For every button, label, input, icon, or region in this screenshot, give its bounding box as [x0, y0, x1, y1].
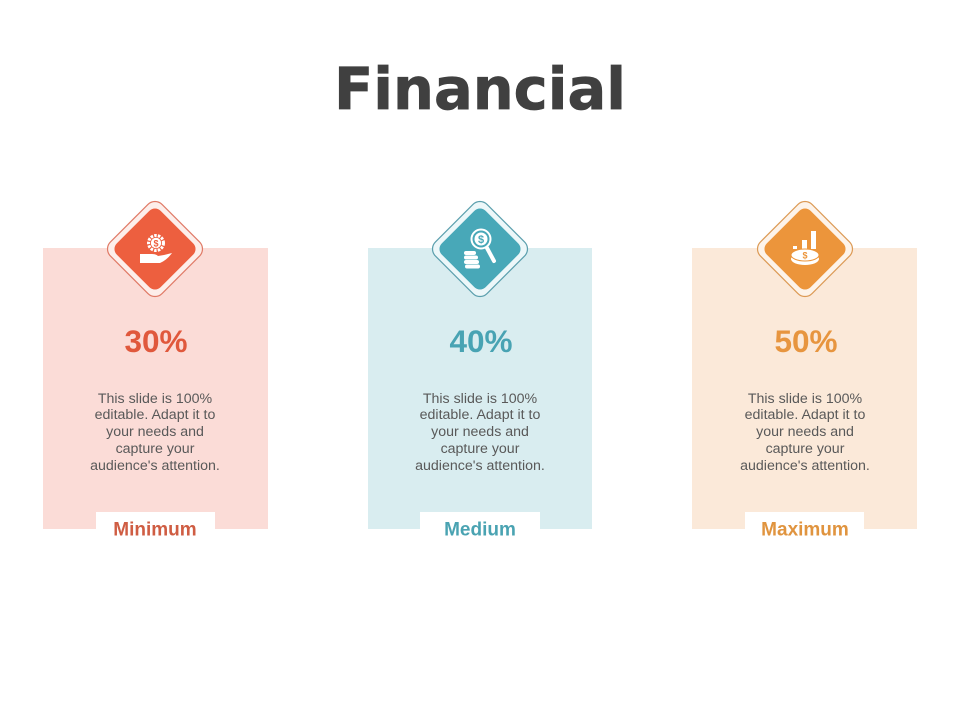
icon: diamond with hand and coin: $ [153, 238, 159, 248]
icon: diamond with bars and coin stack [753, 197, 857, 301]
description: your needs and [756, 424, 854, 440]
panel background [43, 248, 268, 529]
label tab: Minimum [113, 520, 197, 540]
description [740, 391, 870, 474]
description: capture your [766, 441, 845, 457]
panel: minimum [43, 197, 268, 540]
panel: maximum [692, 197, 917, 540]
panel: medium [368, 197, 592, 540]
label tab: Medium [444, 520, 516, 540]
description: This slide is 100% [98, 391, 213, 407]
description: editable. Adapt it to [745, 407, 865, 423]
description: editable. Adapt it to [420, 407, 540, 423]
icon: diamond with magnifier and coins: $ [478, 234, 484, 246]
title: Financial [334, 56, 626, 123]
description: This slide is 100% [748, 391, 863, 407]
icon: diamond with bars and coin stack: $ [802, 250, 808, 260]
description: capture your [441, 441, 520, 457]
description: capture your [116, 441, 195, 457]
description: your needs and [106, 424, 204, 440]
description: your needs and [431, 424, 529, 440]
percentage: 30% [124, 323, 188, 359]
panel background [368, 248, 592, 529]
percentage: 40% [449, 323, 513, 359]
label tab: Maximum [761, 520, 849, 540]
label tab [96, 512, 215, 540]
description: audience's attention. [90, 458, 220, 474]
icon: diamond with magnifier and coins [428, 197, 532, 301]
icon: diamond with hand and coin [103, 197, 207, 301]
description: audience's attention. [415, 458, 545, 474]
panel background [692, 248, 917, 529]
label tab [745, 512, 864, 540]
percentage: 50% [774, 323, 838, 359]
description [90, 391, 220, 474]
description: This slide is 100% [423, 391, 538, 407]
description: editable. Adapt it to [95, 407, 215, 423]
description [415, 391, 545, 474]
label tab [420, 512, 540, 540]
description: audience's attention. [740, 458, 870, 474]
